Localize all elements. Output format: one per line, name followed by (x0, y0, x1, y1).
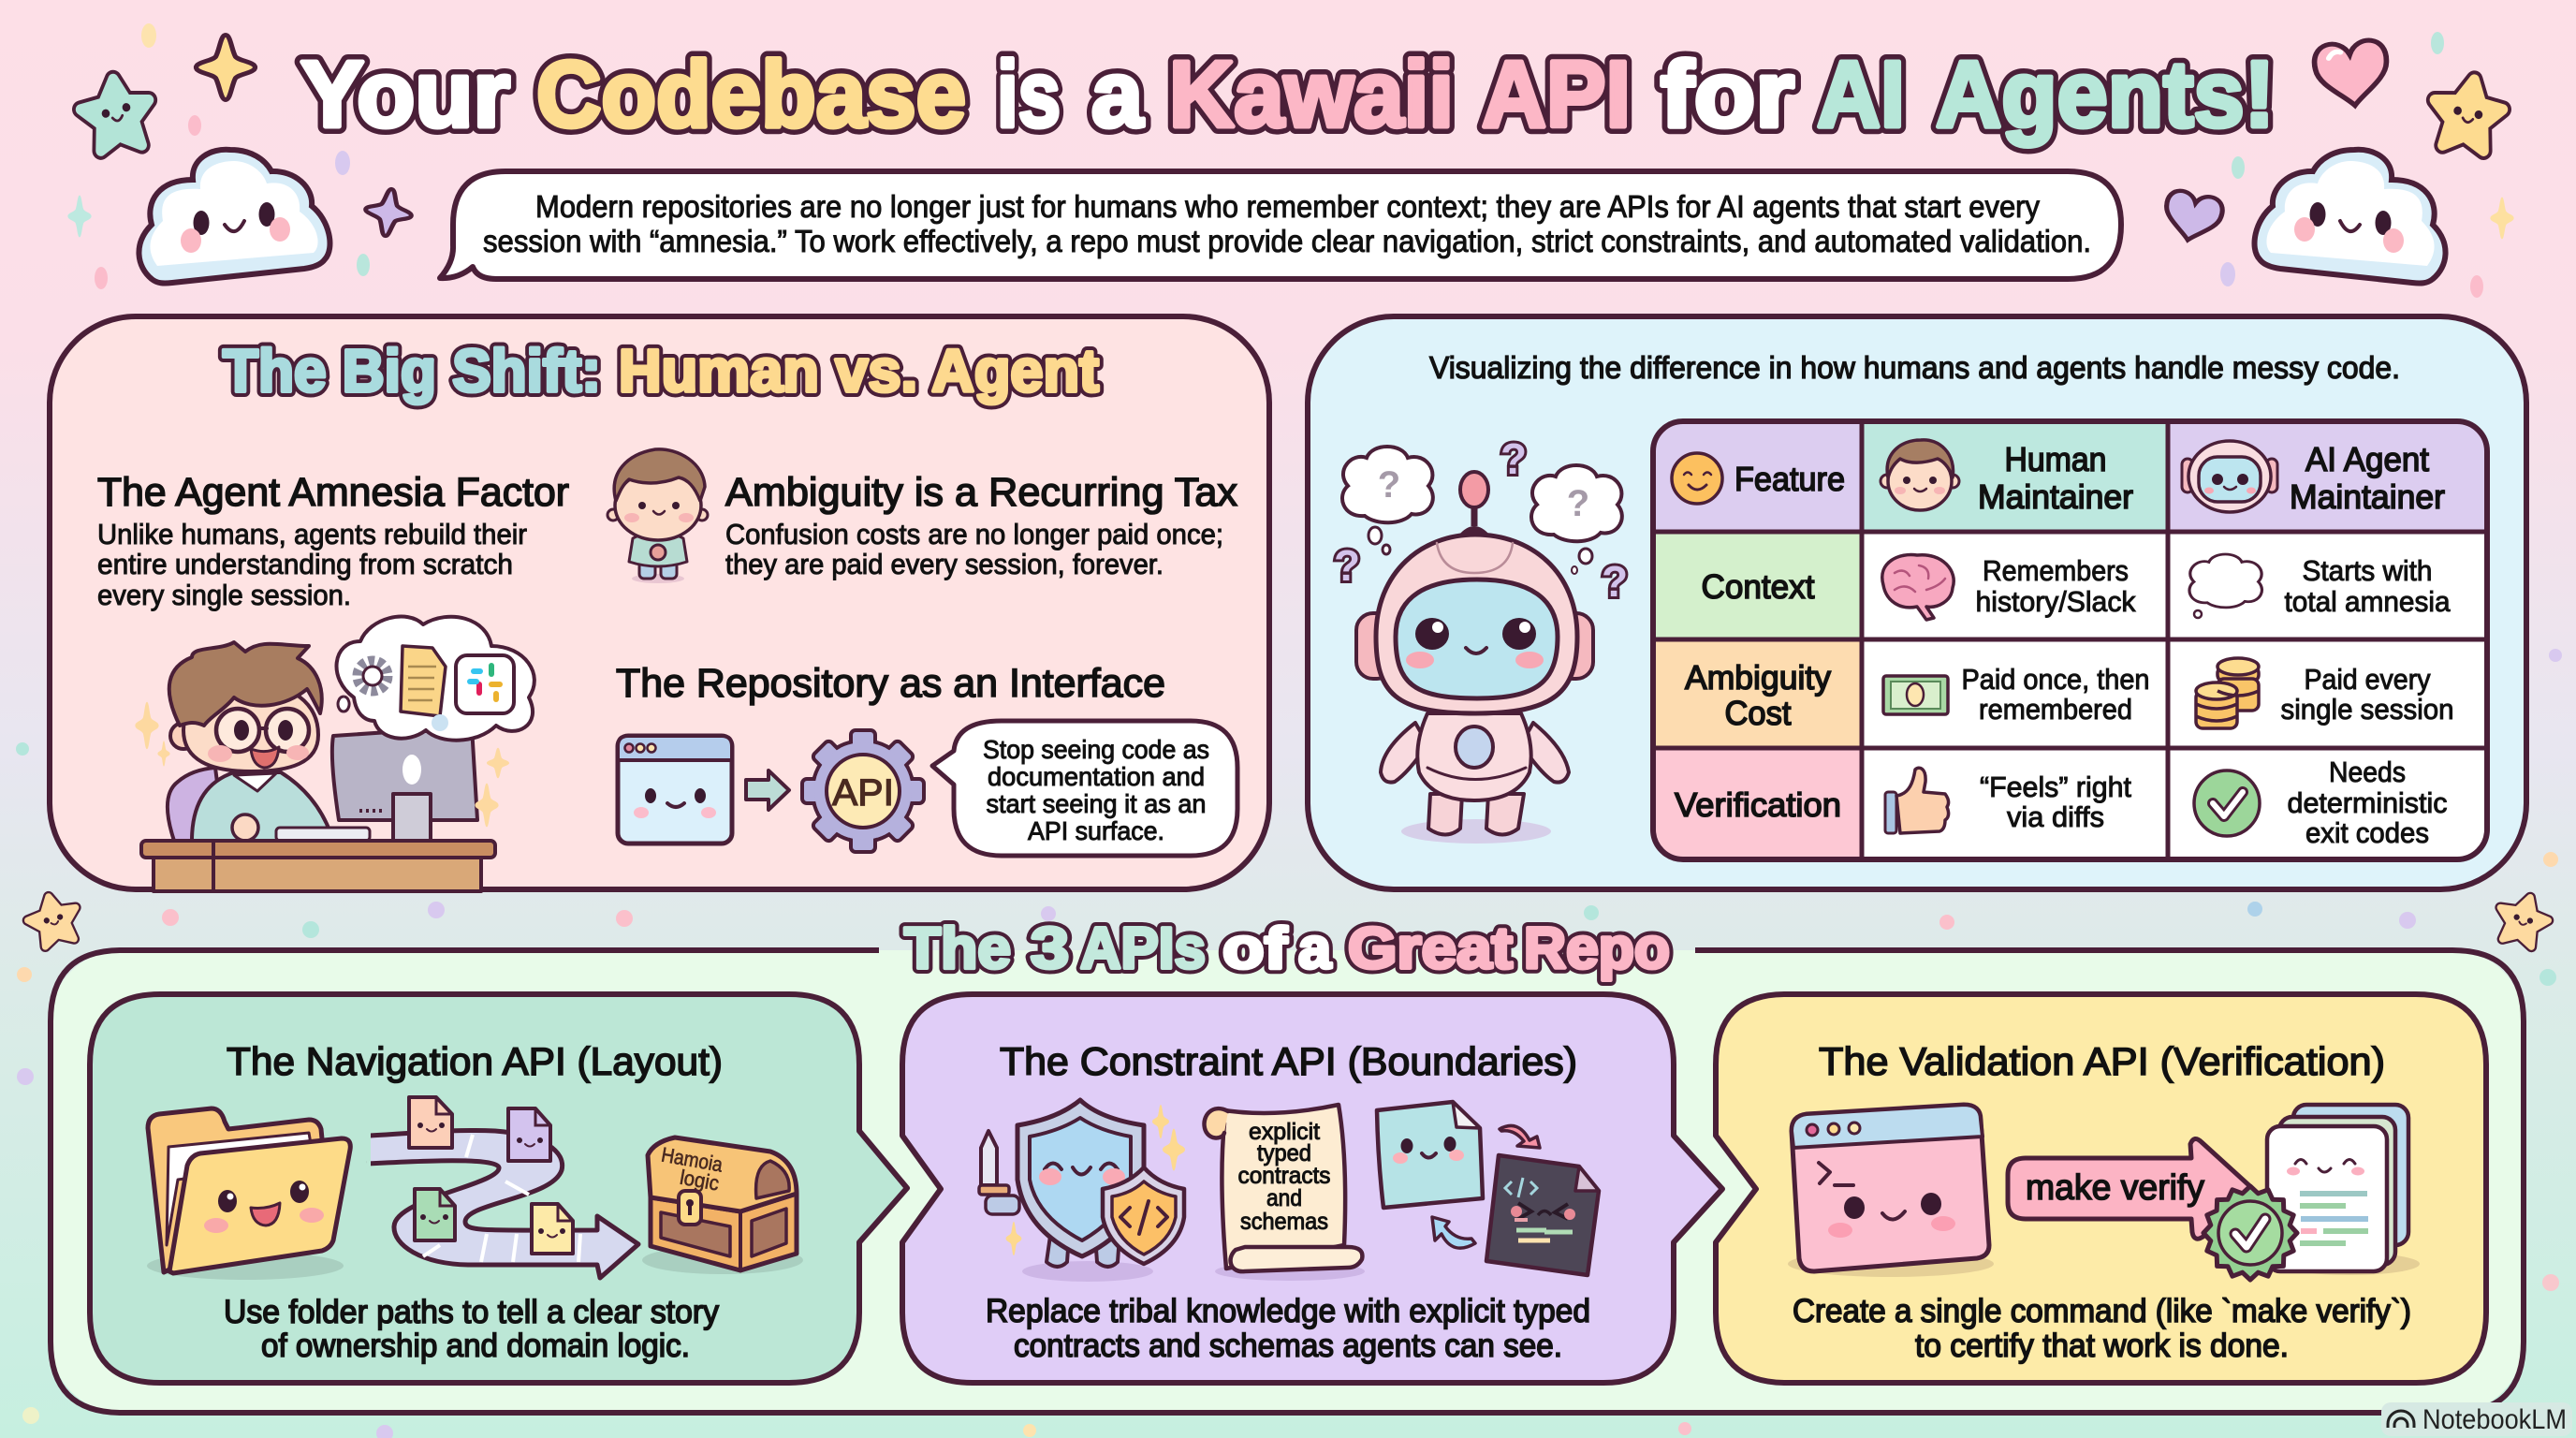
card: navigation api: The Navigation API (Layout) (227, 1039, 723, 1083)
illustration: confused robot (1356, 472, 1593, 844)
intro text: session with “amnesia.” To work effectively, a repo must provide clear navigation, strict constraints, and automated validation. (483, 224, 2091, 258)
text block: agent amnesia factor: Unlike humans, agents rebuild their (97, 518, 527, 550)
card body text (224, 1294, 719, 1364)
header: feature: Feature (1734, 460, 1845, 498)
icon: contract scroll (1205, 1105, 1365, 1281)
text block: repository heading: The Repository as an Interface (616, 661, 1165, 706)
row: verification: exit codes (2305, 816, 2429, 849)
row: ambiguity cost (1685, 658, 2454, 732)
card: constraint api (902, 994, 1722, 1383)
row: context: total amnesia (2284, 585, 2451, 618)
row: verification: deterministic (2288, 786, 2447, 819)
card body text: Create a single command (like `make verify`) (1793, 1293, 2411, 1329)
callout: api surface: documentation and (988, 762, 1205, 791)
thought clouds and question marks (1334, 434, 1628, 606)
card body text (986, 1293, 1590, 1364)
thought clouds and question marks: ? (1378, 464, 1400, 506)
row: verification: Verification (1675, 785, 1841, 824)
icon: shield knight (979, 1100, 1185, 1282)
star: yellow top right (2429, 75, 2507, 153)
section title: Repo (1524, 917, 1670, 981)
star: yellow section right (2493, 890, 2553, 949)
icon: contract scroll: schemas (1240, 1209, 1328, 1235)
header: human maintainer: Human (2005, 440, 2106, 478)
text block: agent amnesia factor (97, 470, 569, 611)
title: AI (1817, 42, 1905, 147)
star: yellow section left (23, 890, 83, 949)
card: navigation api (90, 994, 907, 1383)
icon: terminal mascot (1788, 1105, 1994, 1277)
title: Kawaii (1169, 42, 1454, 147)
section title: a (1298, 917, 1332, 981)
header: human maintainer (1881, 440, 2133, 516)
title: Agents! (1936, 42, 2275, 147)
text block: ambiguity tax: Confusion costs are no longer paid once; (725, 518, 1223, 550)
text block: agent amnesia factor: every single session. (97, 579, 351, 611)
title: Your (300, 42, 510, 147)
text block: agent amnesia factor: entire understanding from scratch (97, 548, 513, 580)
row: ambiguity cost: Paid every (2305, 663, 2431, 696)
sparkle: lavender (362, 186, 415, 239)
icon: treasure chest (642, 1137, 803, 1274)
section title: Great (1348, 917, 1513, 981)
intro text (483, 189, 2091, 258)
row: context (1702, 554, 2451, 620)
section title: The (904, 917, 1011, 981)
panel: the big shift (50, 316, 1269, 891)
text block: agent amnesia factor: The Agent Amnesia Factor (97, 470, 569, 515)
text block: ambiguity tax: they are paid every session, forever. (725, 548, 1164, 580)
header: ai agent maintainer (2182, 440, 2445, 516)
icon: winding path arrow (367, 1097, 638, 1278)
sparkle: yellow top left (197, 35, 255, 100)
row: context: history/Slack (1975, 585, 2136, 618)
callout: api surface: API surface. (1028, 816, 1164, 845)
thought clouds and question marks: ? (1334, 541, 1360, 590)
row: verification (1675, 756, 2447, 849)
comparison table (1653, 421, 2487, 859)
arrow (746, 770, 789, 810)
text block: ambiguity tax: Ambiguity is a Recurring Tax (725, 470, 1238, 515)
row: ambiguity cost: remembered (1979, 693, 2132, 726)
icon: approval seal (2203, 1186, 2297, 1280)
card body text: contracts and schemas agents can see. (1014, 1328, 1562, 1364)
icon: API gear: API (832, 772, 894, 814)
heart: lavender (2160, 188, 2225, 246)
callout: api surface (932, 721, 1237, 856)
title: API (1482, 42, 1631, 147)
header: human maintainer: Maintainer (1978, 477, 2133, 516)
row: verification: “Feels” right (1980, 770, 2131, 803)
thought clouds and question marks: ? (1500, 434, 1527, 483)
row: ambiguity cost: Ambiguity (1685, 658, 1831, 697)
title: for (1661, 42, 1794, 147)
icon: contract scroll: typed (1257, 1140, 1311, 1167)
card: validation api: The Validation API (Verification) (1819, 1039, 2385, 1083)
header: ai agent maintainer: Maintainer (2290, 477, 2445, 516)
panel: three apis (51, 917, 2524, 1413)
header: ai agent maintainer: AI Agent (2305, 440, 2429, 478)
icon: treasure chest: Hamoia (660, 1143, 725, 1177)
mini files on path (409, 1097, 573, 1254)
sparkle: teal (67, 196, 92, 237)
section title: 3 (1031, 917, 1069, 981)
title: Codebase (536, 42, 966, 147)
header: feature (1672, 453, 1845, 504)
icon: browser window (618, 736, 732, 844)
panel heading: The Big Shift: (223, 337, 601, 404)
star: teal top left (77, 75, 154, 153)
card: validation api (1716, 994, 2486, 1383)
icon: contract scroll: explicit (1249, 1119, 1320, 1145)
callout: api surface: start seeing it as an (987, 789, 1206, 818)
card: constraint api: The Constraint API (Boundaries) (1000, 1039, 1577, 1083)
row: ambiguity cost: single session (2280, 693, 2454, 726)
panel caption: Visualizing the difference in how humans and agents handle messy code. (1429, 350, 2400, 385)
icon: happy folder (147, 1108, 350, 1280)
icon: small human (607, 449, 708, 583)
icon: contract scroll: contracts (1237, 1163, 1331, 1189)
panel heading: Human vs. Agent (619, 337, 1099, 404)
card body text: to certify that work is done. (1915, 1328, 2289, 1364)
callout: api surface: Stop seeing code as (983, 735, 1209, 764)
cloud mascot left (139, 150, 329, 284)
cloud mascot right (2255, 150, 2446, 284)
illustration: developer at desk (135, 642, 509, 891)
title: is (997, 42, 1061, 147)
intro speech bubble (440, 171, 2121, 279)
section title (904, 917, 1670, 981)
text block: ambiguity tax (725, 470, 1238, 580)
icon: stacked documents (2267, 1105, 2420, 1275)
card body text: of ownership and domain logic. (261, 1328, 690, 1364)
title: a (1091, 42, 1144, 147)
card body text: Use folder paths to tell a clear story (224, 1294, 719, 1330)
section title: APIs (1080, 917, 1206, 981)
thought bubble: context clutter (337, 617, 534, 741)
row: ambiguity cost: Paid once, then (1962, 663, 2149, 696)
intro text: Modern repositories are no longer just for humans who remember context; they are APIs for AI agents that start every (535, 189, 2040, 224)
row: context: Remembers (1983, 554, 2129, 587)
heart: pink (2313, 38, 2391, 110)
row: verification: via diffs (2007, 800, 2104, 833)
arrow: make verify: make verify (2026, 1168, 2204, 1208)
icon: API gear (802, 730, 924, 852)
icon: documents swap (1377, 1102, 1599, 1275)
thought clouds and question marks: ? (1567, 483, 1589, 524)
section title: of (1222, 917, 1287, 981)
row: verification: Needs (2329, 756, 2406, 788)
icon: treasure chest: logic (678, 1166, 721, 1196)
panel heading (223, 337, 1099, 404)
sparkle: yellow right (2490, 198, 2514, 239)
row: context: Context (1702, 567, 1814, 606)
icon: contract scroll: and (1266, 1185, 1302, 1211)
thought clouds and question marks: ? (1602, 557, 1628, 606)
arrow: make verify (2008, 1138, 2253, 1239)
title (300, 42, 2275, 147)
panel: comparison (1308, 316, 2526, 889)
card body text: Replace tribal knowledge with explicit typed (986, 1293, 1590, 1329)
card body text (1793, 1293, 2411, 1364)
row: context: Starts with (2303, 554, 2432, 587)
row: ambiguity cost: Cost (1724, 694, 1792, 732)
